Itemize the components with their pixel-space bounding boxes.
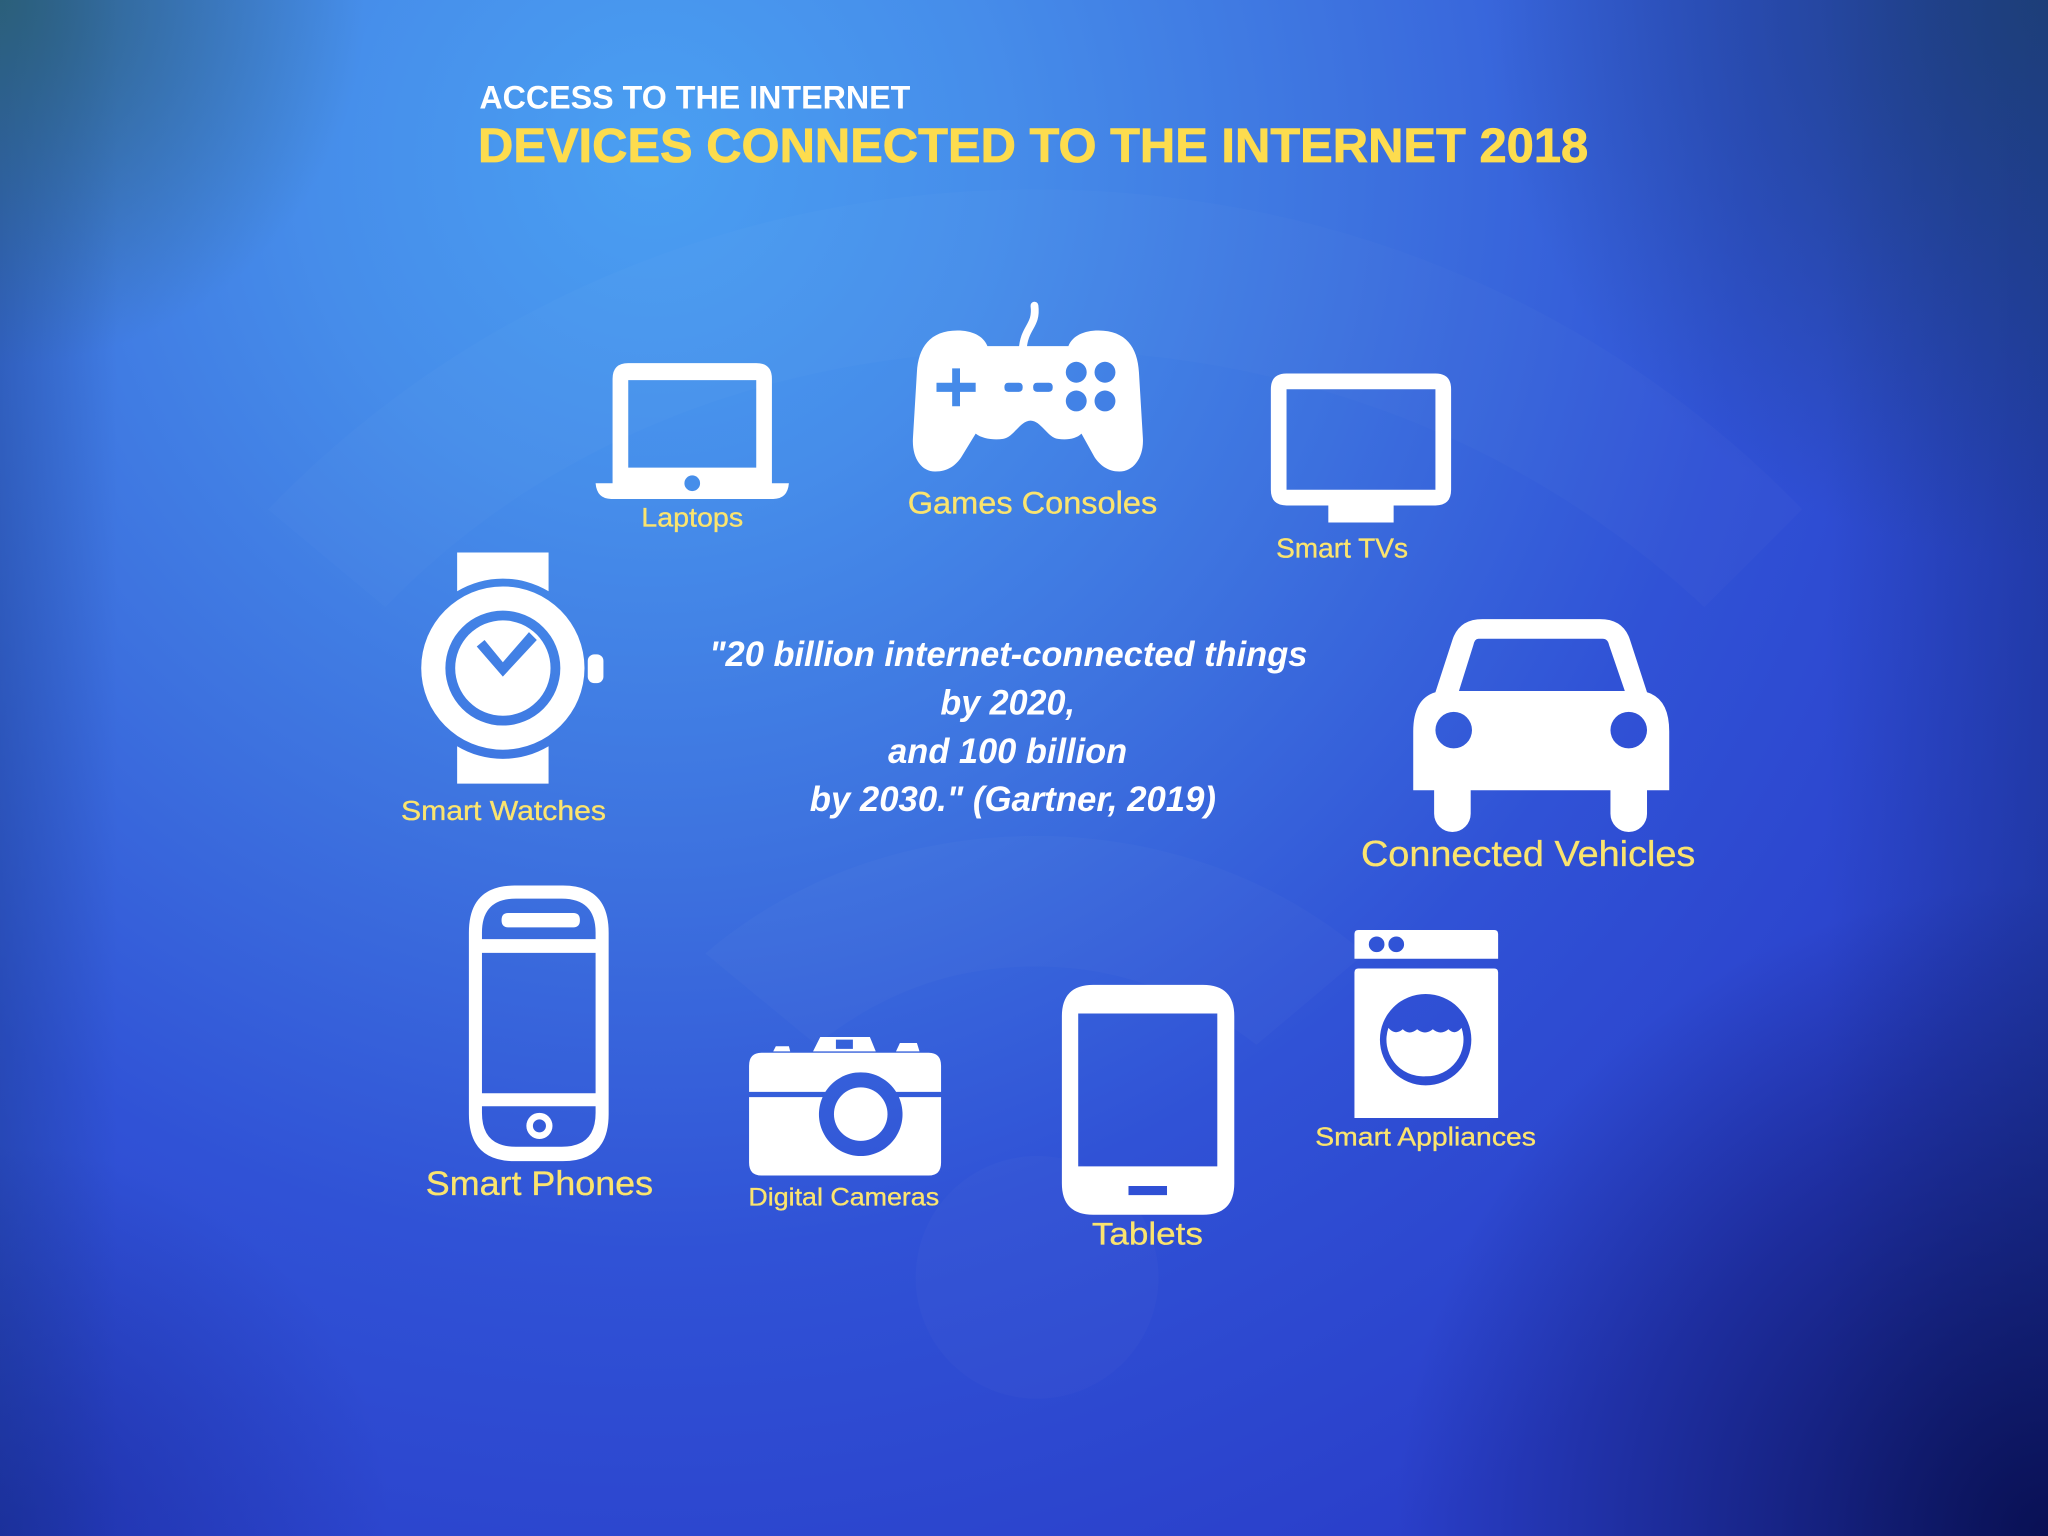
icon: car bbox=[1413, 619, 1669, 832]
label: games consoles: Games Consoles bbox=[908, 485, 1157, 520]
device: games console bbox=[908, 306, 1157, 520]
quote: by 2020, bbox=[940, 683, 1075, 722]
label: smart tvs: Smart TVs bbox=[1276, 533, 1408, 564]
icon: camera bbox=[749, 1037, 941, 1176]
label: connected vehicles: Connected Vehicles bbox=[1361, 833, 1695, 874]
icon: phone bbox=[469, 886, 609, 1161]
quote bbox=[709, 635, 1307, 819]
icon: tablet bbox=[1062, 985, 1234, 1215]
icon: game controller bbox=[913, 306, 1143, 472]
overline heading: ACCESS TO THE INTERNET bbox=[479, 78, 910, 115]
label: smart phones: Smart Phones bbox=[426, 1165, 653, 1203]
label: digital cameras: Digital Cameras bbox=[748, 1185, 939, 1212]
device: smart phone bbox=[426, 886, 653, 1203]
icon: tv bbox=[1271, 374, 1451, 522]
label: tablets: Tablets bbox=[1092, 1217, 1203, 1252]
device: smart watch bbox=[401, 552, 606, 826]
device: smart appliance bbox=[1315, 930, 1536, 1151]
device: digital camera bbox=[748, 1037, 941, 1212]
quote: by 2030." (Gartner, 2019) bbox=[810, 780, 1216, 819]
device: tablet bbox=[1062, 985, 1234, 1252]
main title: DEVICES CONNECTED TO THE INTERNET 2018 bbox=[478, 119, 1588, 173]
quote: "20 billion internet-connected things bbox=[709, 635, 1307, 674]
icon: washing machine bbox=[1354, 930, 1498, 1118]
label: smart watches: Smart Watches bbox=[401, 795, 606, 826]
device: connected vehicle bbox=[1361, 619, 1695, 874]
wifi watermark bbox=[268, 189, 1802, 1399]
device: laptop bbox=[596, 363, 789, 532]
label: smart appliances: Smart Appliances bbox=[1315, 1121, 1536, 1151]
device: smart tv bbox=[1271, 374, 1451, 564]
label: laptops: Laptops bbox=[641, 502, 743, 532]
quote: and 100 billion bbox=[888, 732, 1127, 771]
title block bbox=[478, 78, 1588, 173]
icon: laptop bbox=[596, 363, 789, 499]
icon: watch bbox=[421, 552, 603, 784]
